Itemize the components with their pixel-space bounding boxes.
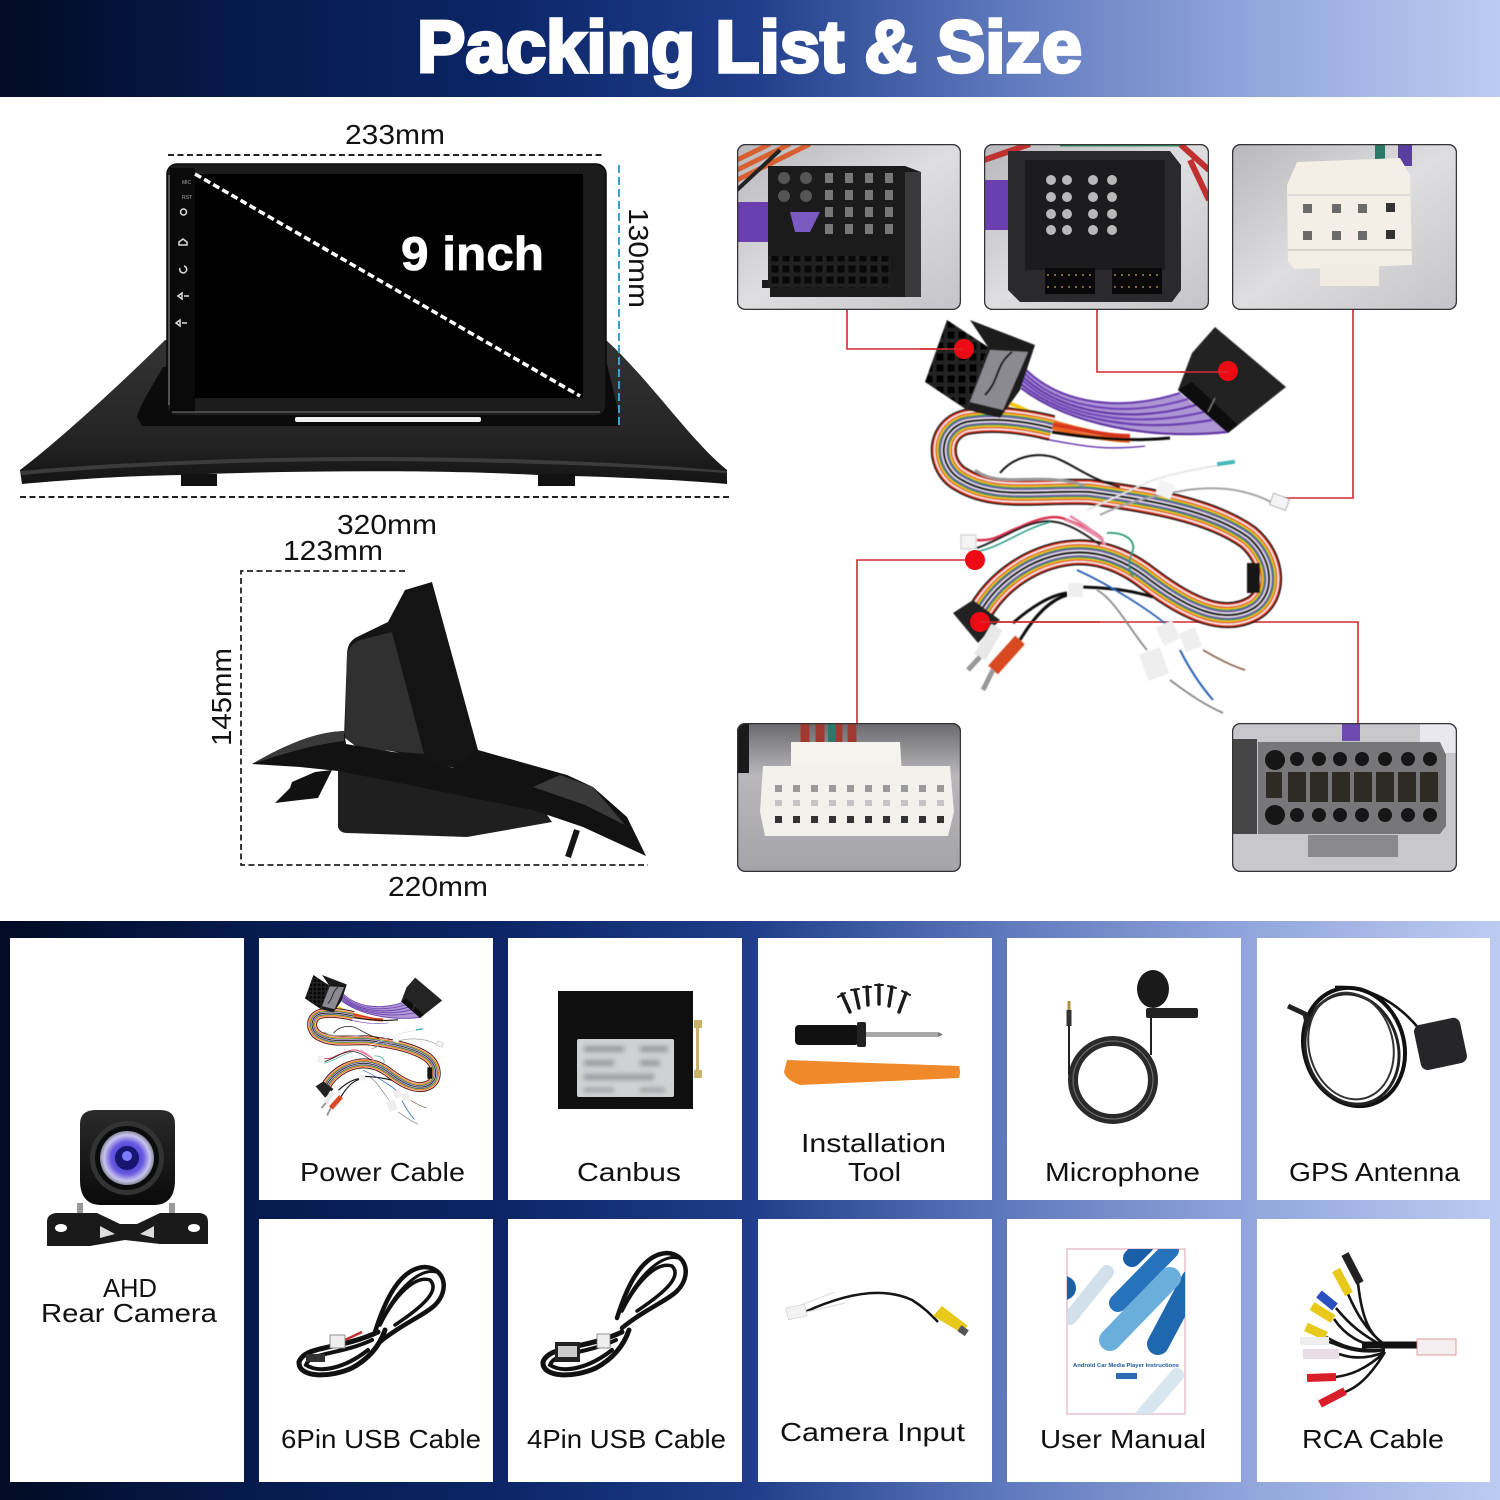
photo: white 8 pin connector <box>1232 144 1457 310</box>
label 145mm: 145mm <box>206 648 237 746</box>
icon: camera input cable <box>786 1292 969 1336</box>
side buttons: RST <box>182 195 192 201</box>
card: installation tool <box>758 938 992 1200</box>
wing highlight <box>252 731 625 825</box>
fin <box>344 582 480 775</box>
label: Installation Tool: Installation <box>801 1128 946 1158</box>
card: 4pin USB cable <box>508 1219 742 1482</box>
label 220mm: 220mm <box>388 871 488 902</box>
bezel lower rim <box>21 457 727 475</box>
white light bar <box>295 417 481 422</box>
label: 4Pin USB Cable: 4Pin USB Cable <box>527 1424 726 1454</box>
red marker dots <box>954 339 1238 632</box>
lower box <box>338 762 552 837</box>
icon: microphone <box>1066 970 1198 1119</box>
side buttons <box>176 180 192 326</box>
width dimension top: 233mm <box>345 119 445 150</box>
icon: pry tool <box>784 1060 960 1085</box>
screen <box>195 174 583 398</box>
icon: screws <box>838 985 910 1012</box>
card: power cable <box>259 938 493 1200</box>
left clip <box>275 770 332 803</box>
label: AHD Rear Camera: AHD <box>103 1273 157 1303</box>
fin inner panel <box>345 632 424 754</box>
screen frame <box>167 164 606 416</box>
icon: rear camera <box>47 1110 208 1246</box>
icon: RCA cable <box>1300 1254 1456 1404</box>
wing <box>252 731 646 856</box>
height dimension: 130mm <box>623 208 654 308</box>
peg <box>568 830 577 857</box>
diagonal dashed line <box>195 174 580 396</box>
card: user manual <box>1007 1219 1241 1482</box>
card: 6pin USB cable <box>259 1219 493 1482</box>
header band <box>0 0 1500 97</box>
photo: white 20 pin connector <box>737 723 961 872</box>
icon: user manual <box>1066 1248 1186 1415</box>
card: camera input <box>758 1219 992 1482</box>
label: Camera Input: Camera Input <box>780 1417 966 1447</box>
accessories band background <box>0 921 1500 1500</box>
label: Canbus: Canbus <box>577 1157 681 1187</box>
dash bezel body <box>20 340 727 484</box>
9 inch label: 9 inch <box>401 227 544 280</box>
red lines over connectors <box>920 349 1228 622</box>
label: User Manual: User Manual <box>1040 1424 1206 1454</box>
label: Microphone: Microphone <box>1045 1157 1200 1187</box>
label: Installation Tool: Tool <box>848 1157 901 1187</box>
bracket side view diagram <box>206 535 648 902</box>
card: RCA cable <box>1257 1219 1490 1482</box>
label: AHD Rear Camera: Rear Camera <box>41 1298 218 1328</box>
wiring harness <box>925 320 1290 713</box>
photo: quadlock connector rear <box>737 144 961 310</box>
dashed frame <box>241 571 648 865</box>
width dimension bottom: 320mm <box>337 509 437 540</box>
label 123mm: 123mm <box>283 535 383 566</box>
label: Power Cable: Power Cable <box>300 1157 465 1187</box>
display dimensions diagram <box>20 119 730 540</box>
icon: harness <box>305 975 444 1124</box>
card: canbus <box>508 938 742 1200</box>
icon: screwdriver <box>795 1022 943 1047</box>
icon: canbus box <box>558 991 702 1109</box>
side buttons: MIC <box>182 180 192 186</box>
title: Packing List & Size <box>417 7 1082 88</box>
label: RCA Cable: RCA Cable <box>1302 1424 1444 1454</box>
recess <box>137 360 618 426</box>
label: GPS Antenna: GPS Antenna <box>1289 1157 1461 1187</box>
red callout lines <box>847 310 1358 723</box>
icon: 6pin cable <box>299 1267 444 1375</box>
icon: user manual: Android Car Media Player Instructions <box>1073 1363 1179 1369</box>
photo: quadlock connector front <box>984 144 1209 310</box>
photo: grey ISO connector <box>1232 723 1457 872</box>
label: 6Pin USB Cable: 6Pin USB Cable <box>281 1424 481 1454</box>
card: GPS antenna <box>1257 938 1490 1200</box>
card: microphone <box>1007 938 1241 1200</box>
icon: 4pin cable <box>543 1253 686 1375</box>
card: AHD rear camera <box>10 938 244 1482</box>
mounting clips <box>181 474 575 486</box>
icon: GPS antenna <box>1288 974 1468 1120</box>
